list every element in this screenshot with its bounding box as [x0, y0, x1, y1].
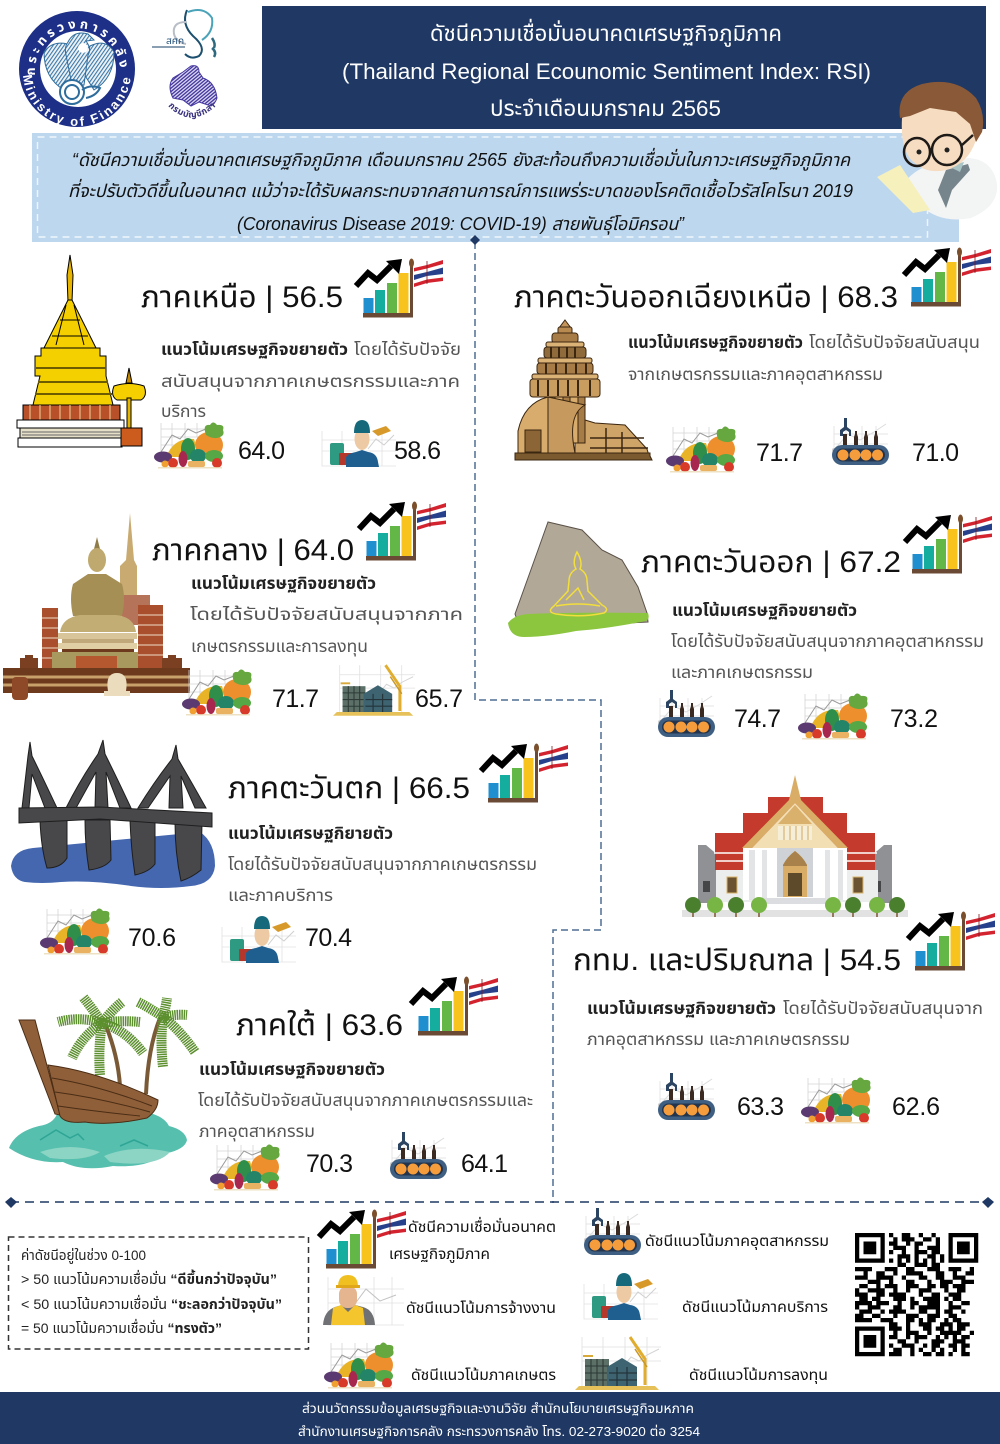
- body line 2: จากเกษตรกรรมและภาคอุตสาหกรรม: [628, 365, 883, 385]
- heading: ภาคตะวันตก | 66.5: [228, 772, 470, 805]
- legend label: RSI line 1: ดัชนีความเชื่อมั่นอนาคต: [408, 1216, 556, 1236]
- body: โดยได้รับปัจจัยสนับสนุนจาก: [783, 998, 983, 1019]
- value: industry: 64.1: [461, 1150, 508, 1178]
- illustration: rock Buddha: [508, 522, 649, 637]
- legend icon: agriculture: [324, 1342, 394, 1388]
- body line 2: สนับสนุนจากภาคเกษตรกรรมและภาค: [161, 372, 460, 392]
- illustration: Khmer prang: [515, 320, 652, 460]
- icon: agriculture: [210, 1144, 280, 1190]
- panel: West: [11, 740, 568, 963]
- quote line 3: (Coronavirus Disease 2019: COVID-19) สายพันธุ์โอมิครอน”: [237, 214, 685, 235]
- illustration: bridge over river: [11, 740, 215, 888]
- heading: ภาคใต้ | 63.6: [236, 1009, 403, 1042]
- panel: title banner: [262, 6, 986, 129]
- quote line 1: “ดัชนีความเชื่อมั่นอนาคตเศรษฐกิจภูมิภาค เดือนมกราคม 2565 ยังสะท้อนถึงความเชื่อมั่นในภาวะเศรษฐกิจภูมิภาค: [72, 147, 851, 171]
- value: agriculture: 62.6: [892, 1093, 940, 1121]
- footer line 1: ส่วนนวัตกรรมข้อมูลเศรษฐกิจและงานวิจัย สำนักนโยบายเศรษฐกิจมหภาค: [302, 1401, 694, 1416]
- divider: center dashed route: [475, 242, 601, 1203]
- legend icon: investment: [575, 1337, 661, 1390]
- legend label: RSI line 2: เศรษฐกิจภูมิภาค: [389, 1246, 490, 1263]
- logo: agency swirl: [152, 10, 215, 58]
- icon: industry: [658, 1073, 715, 1120]
- body line 3: ภาคอุตสาหกรรม: [199, 1122, 315, 1142]
- value: agriculture: 71.7: [756, 439, 803, 467]
- body: โดยได้รับปัจจัย: [354, 339, 461, 359]
- value: investment: 65.7: [415, 685, 463, 713]
- note line 2: > 50 แนวโน้มความเชื่อมั่น “ดีขึ้นกว่าปัจจุบัน”: [21, 1269, 277, 1288]
- illustration: seated Buddha: [3, 513, 190, 700]
- legend: [319, 1208, 829, 1390]
- icon: industry: [832, 418, 889, 465]
- heading: ภาคกลาง | 64.0: [152, 534, 354, 567]
- body: โดยได้รับปัจจัยสนับสนุน: [809, 332, 980, 353]
- body line 2: ภาคอุตสาหกรรม และภาคเกษตรกรรม: [587, 1030, 850, 1050]
- icon: RSI chart: [904, 248, 991, 306]
- value: industry: 63.3: [737, 1093, 784, 1121]
- note line 1: ค่าดัชนีอยู่ในช่วง 0-100: [21, 1247, 146, 1264]
- illustration: Thai temple: [682, 775, 908, 917]
- heading: กทม. และปริมณฑล | 54.5: [573, 944, 901, 977]
- panel: Northeast: [514, 248, 991, 472]
- legend label: industry: ดัชนีแนวโน้มภาคอุตสาหกรรม: [645, 1233, 829, 1250]
- logo: Ministry of Finance: [19, 11, 135, 127]
- icon: agriculture: [40, 908, 110, 954]
- footer line 2: สำนักงานเศรษฐกิจการคลัง กระทรวงการคลัง โทร. 02-273-9020 ต่อ 3254: [298, 1424, 700, 1439]
- value: industry: 71.0: [912, 439, 959, 467]
- body bold: แนวโน้มเศรษฐกิจขยายตัว: [587, 999, 776, 1018]
- icon: RSI chart: [905, 514, 992, 574]
- legend icon: RSI: [319, 1210, 406, 1268]
- value: industry: 74.7: [734, 705, 781, 733]
- value: services: 58.6: [394, 437, 441, 465]
- note line 3: < 50 แนวโน้มความเชื่อมั่น “ชะลอกว่าปัจจุบัน”: [21, 1294, 282, 1313]
- panel: North: [17, 255, 461, 468]
- icon: doctor reading: [877, 82, 997, 220]
- legend label: services: ดัชนีแนวโน้มภาคบริการ: [682, 1299, 828, 1316]
- logo: Ministry of Finance: Ministry of Finance: [23, 74, 130, 126]
- body line 2: โดยได้รับปัจจัยสนับสนุนจากภาค: [190, 604, 463, 625]
- icon: RSI chart: [356, 258, 443, 318]
- value: agriculture: 70.6: [128, 924, 176, 952]
- value: agriculture: 73.2: [890, 705, 938, 733]
- icon: industry: [390, 1132, 447, 1179]
- icon: services: [322, 420, 396, 467]
- panel: East: [508, 514, 992, 740]
- footer: [0, 1392, 1000, 1444]
- title line 1: ดัชนีความเชื่อมั่นอนาคตเศรษฐกิจภูมิภาค: [430, 18, 782, 47]
- QR code: [855, 1233, 978, 1356]
- logo: agency swirl: สศค: [166, 36, 184, 47]
- icon: industry: [658, 690, 715, 737]
- panel: Central: [3, 502, 463, 716]
- note line 4: = 50 แนวโน้มความเชื่อมั่น “ทรงตัว”: [21, 1318, 222, 1336]
- panel: index range note: [8, 1237, 308, 1349]
- icon: RSI chart: [411, 976, 498, 1036]
- value: agriculture: 70.3: [306, 1150, 353, 1178]
- icon: agriculture: [801, 1078, 871, 1124]
- legend icon: employment: [323, 1275, 404, 1325]
- value: agriculture: 71.7: [272, 685, 319, 713]
- legend label: investment: ดัชนีแนวโน้มการลงทุน: [689, 1367, 828, 1384]
- panel: Bangkok and vicinity: [573, 775, 995, 1124]
- divider: bottom dashed line: [5, 1197, 994, 1208]
- panel: South: [9, 976, 533, 1190]
- value: agriculture: 64.0: [238, 437, 285, 465]
- body line 2: โดยได้รับปัจจัยสนับสนุนจากภาคเกษตรกรรม: [228, 854, 537, 875]
- body bold: แนวโน้มเศรษฐกิยายตัว: [228, 824, 393, 843]
- logo: Comptroller General: [168, 65, 218, 120]
- heading: ภาคตะวันออก | 67.2: [641, 546, 901, 579]
- legend label: agriculture: ดัชนีแนวโน้มภาคเกษตร: [411, 1367, 556, 1384]
- value: services: 70.4: [305, 924, 352, 952]
- icon: agriculture: [154, 422, 224, 468]
- icon: agriculture: [798, 694, 868, 740]
- title line 2: (Thailand Regional Ecounomic Sentiment Index: RSI): [342, 59, 871, 84]
- body line 2: โดยได้รับปัจจัยสนับสนุนจากภาคเกษตรกรรมและ: [198, 1090, 533, 1111]
- icon: services: [222, 916, 296, 963]
- logo: Ministry of Finance: กระทรวงการคลัง: [28, 21, 127, 75]
- icon: agriculture: [666, 426, 736, 472]
- icon: RSI chart: [359, 502, 446, 560]
- legend icon: services: [584, 1273, 658, 1320]
- icon: top diamond: [470, 235, 480, 245]
- quote line 2: ที่จะปรับตัวดีขึ้นในอนาคต แม้ว่าจะได้รับผลกระทบจากสถานการณ์การแพร่ระบาดของโรคติดเชื้อไวรัสโคโรนา 2019: [68, 178, 853, 201]
- heading: ภาคตะวันออกเฉียงเหนือ | 68.3: [514, 281, 898, 314]
- icon: RSI chart: [481, 744, 568, 802]
- panel: quote: [32, 133, 959, 242]
- body bold: แนวโน้มเศรษฐกิจขยายตัว: [628, 333, 803, 352]
- legend icon: industry: [584, 1208, 641, 1255]
- body line 3: และภาคบริการ: [228, 886, 333, 905]
- legend label: employment: ดัชนีแนวโน้มการจ้างงาน: [406, 1300, 556, 1317]
- body line 3: เกษตรกรรมและการลงทุน: [191, 637, 368, 657]
- body bold: แนวโน้มเศรษฐกิจขยายตัว: [161, 340, 348, 359]
- body bold: แนวโน้มเศรษฐกิจขยายตัว: [672, 601, 857, 620]
- icon: agriculture: [182, 670, 252, 716]
- body line 3: บริการ: [161, 402, 206, 421]
- body bold: แนวโน้มเศรษฐกิจขยายตัว: [199, 1060, 385, 1079]
- body line 2: โดยได้รับปัจจัยสนับสนุนจากภาคอุตสาหกรรม: [671, 631, 984, 652]
- icon: RSI chart: [908, 912, 995, 970]
- icon: investment: [333, 665, 415, 716]
- title line 3: ประจำเดือนมกราคม 2565: [490, 96, 721, 121]
- illustration: long-tail boat and island: [9, 997, 195, 1168]
- body line 3: และภาคเกษตรกรรม: [671, 663, 813, 682]
- heading: ภาคเหนือ | 56.5: [141, 281, 343, 314]
- body bold: แนวโน้มเศรษฐกิจขยายตัว: [191, 574, 376, 593]
- illustration: golden chedi: [17, 255, 145, 447]
